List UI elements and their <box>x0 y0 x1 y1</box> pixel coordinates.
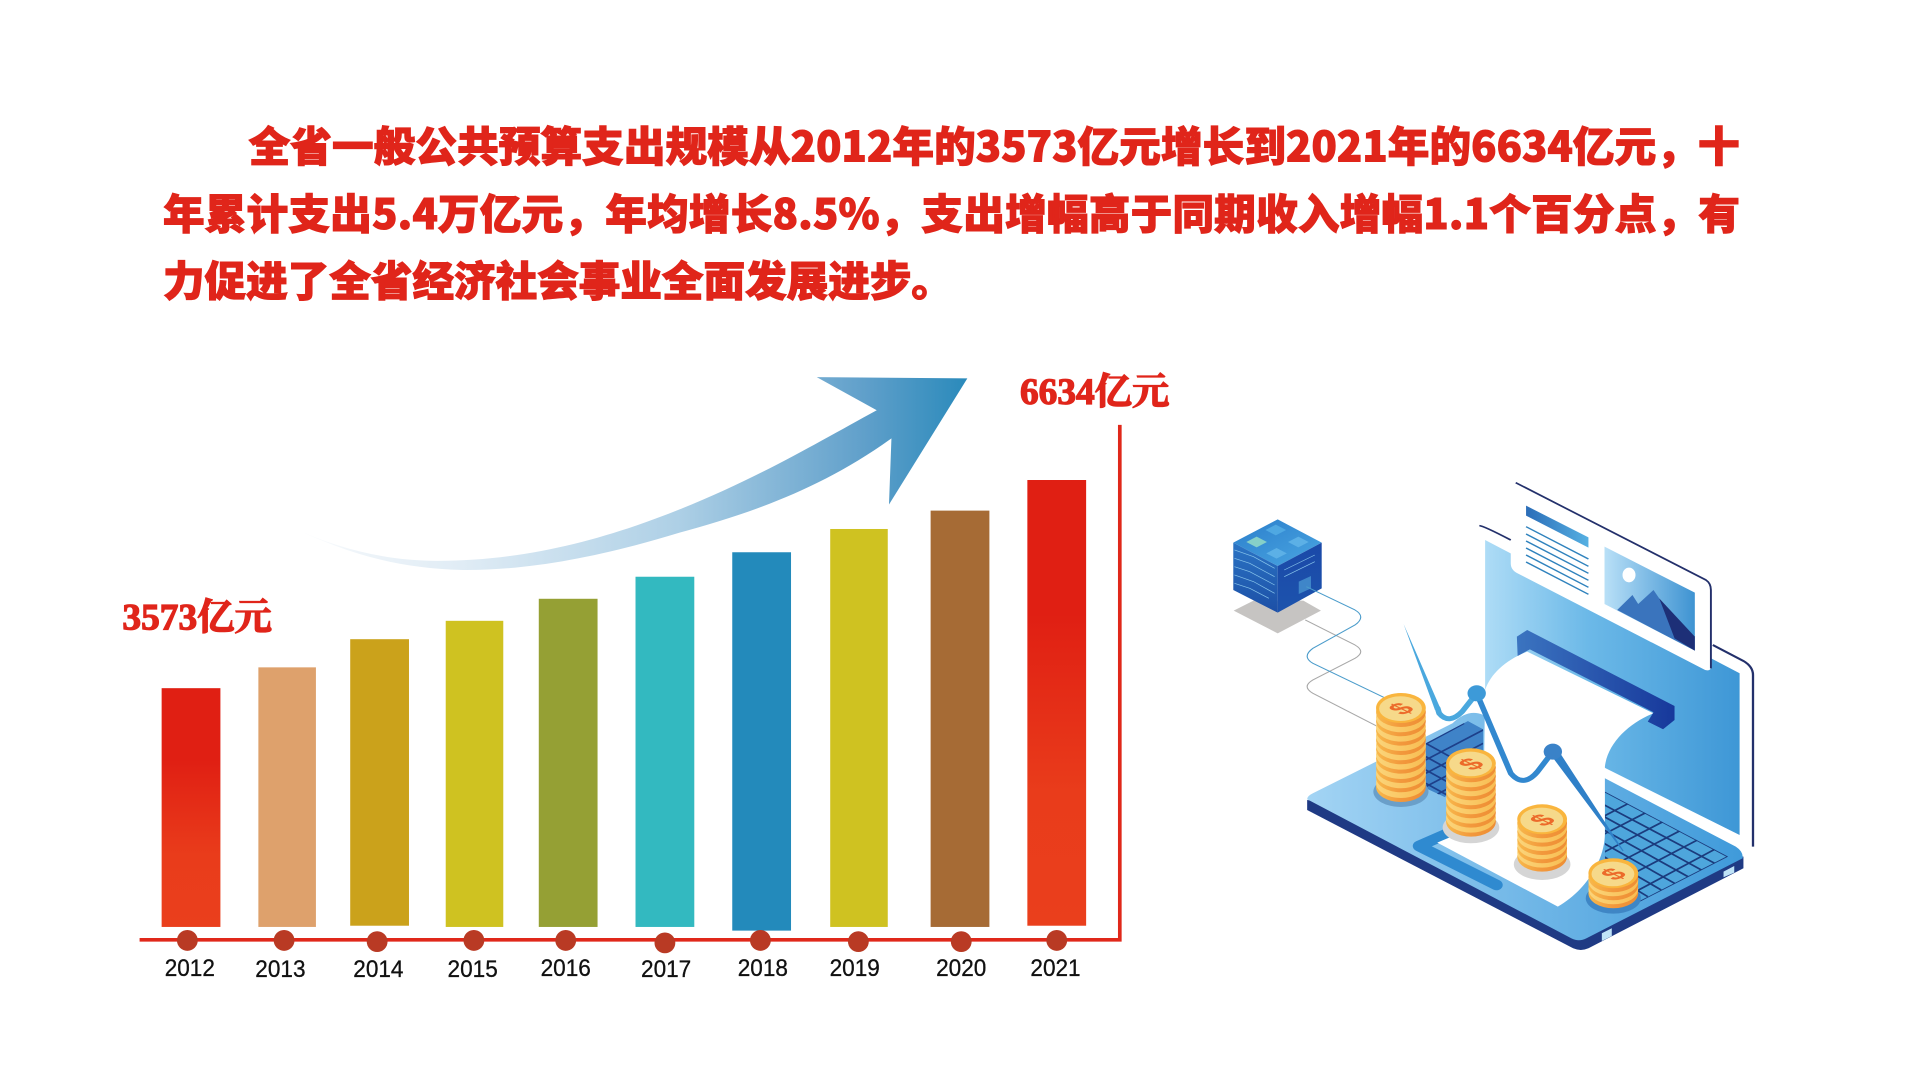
value label 3573: 3573亿元 <box>122 596 272 637</box>
connector wires <box>1305 587 1384 727</box>
bars <box>162 480 1086 931</box>
laptop screen <box>1485 540 1740 835</box>
coin stack 4: $ <box>1593 864 1634 884</box>
coin stack 1 <box>1373 693 1428 807</box>
laptop base <box>1307 713 1743 950</box>
year labels: 2021 <box>1030 955 1081 982</box>
year labels: 2020 <box>936 955 986 982</box>
illustration: laptop with coins <box>1233 480 1753 950</box>
axis lines <box>140 425 1120 940</box>
bar chart <box>122 371 1169 983</box>
year labels: 2018 <box>738 955 788 982</box>
intro paragraph: 全省一般公共预算支出规模从2012年的3573亿元增长到2021年的6634亿元，十 <box>249 114 1740 174</box>
coin stack 1: $ <box>1381 699 1422 718</box>
intro paragraph: 年累计支出5.4万亿元，年均增长8.5%，支出增幅高于同期收入增幅1.1个百分点，有 <box>163 181 1740 241</box>
axis dots <box>177 930 1067 953</box>
floating window <box>1479 480 1711 670</box>
coin stack 3 <box>1514 804 1570 880</box>
year labels: 2013 <box>255 956 306 983</box>
year labels: 2015 <box>448 956 498 983</box>
trend line <box>1404 624 1623 851</box>
paper sheet <box>1437 652 1653 907</box>
intro paragraph <box>163 114 1740 308</box>
year labels <box>165 955 1081 983</box>
intro paragraph: 力促进了全省经济社会事业全面发展进步。 <box>163 248 953 308</box>
coin stack 3: $ <box>1522 810 1563 830</box>
icon: data cube <box>1233 519 1322 633</box>
year labels: 2017 <box>641 956 691 983</box>
growth arrow <box>293 377 967 570</box>
laptop back frame <box>1713 645 1753 847</box>
year labels: 2014 <box>353 956 403 983</box>
value label 6634: 6634亿元 <box>1020 371 1169 412</box>
year labels: 2016 <box>541 955 591 982</box>
year labels: 2012 <box>165 955 215 982</box>
coin stack 2: $ <box>1451 754 1492 774</box>
trackpad edge <box>1419 832 1497 885</box>
left keyboard <box>1426 721 1484 797</box>
year labels: 2019 <box>830 955 880 982</box>
printer slot <box>1517 630 1675 729</box>
right keyboard <box>1598 792 1728 902</box>
coin stack 2 <box>1443 748 1499 843</box>
coin stack 4 <box>1586 858 1641 914</box>
